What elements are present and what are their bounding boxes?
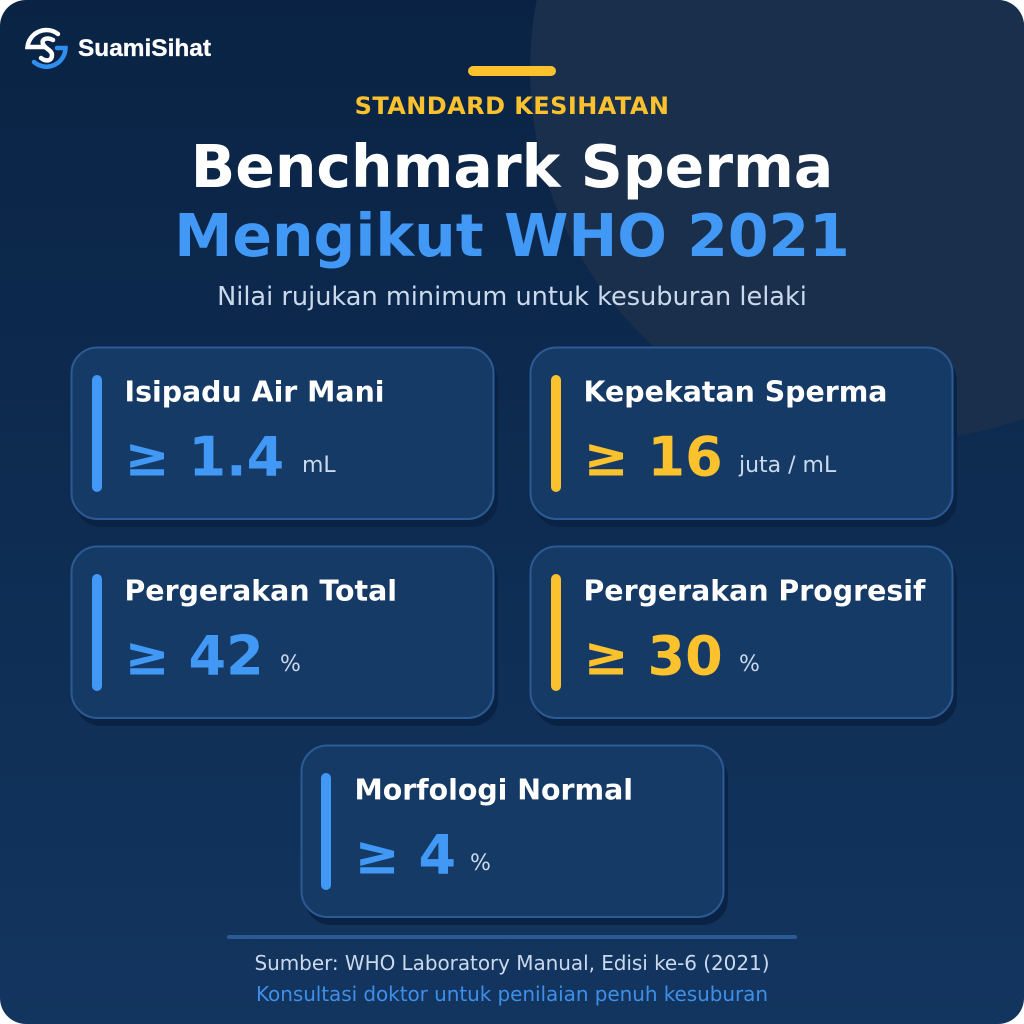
panel: Morfologi Normal: % [470, 851, 491, 876]
panel: Isipadu Air Mani: Isipadu Air Mani [124, 376, 385, 408]
consultation note: Konsultasi doktor untuk penilaian penuh kesuburan [256, 982, 768, 1006]
panel: Pergerakan Progresif: % [739, 652, 760, 677]
panel: Kepekatan Sperma: ≥ 16 [584, 426, 723, 488]
panel: Kepekatan Sperma: Kepekatan Sperma [584, 376, 887, 408]
panel: Pergerakan Progresif: ≥ 30 [584, 624, 723, 688]
panel: Morfologi Normal: ≥ 4 [354, 824, 456, 886]
panel: Kepekatan Sperma [530, 348, 957, 527]
title: Benchmark Sperma [191, 133, 833, 201]
source text: Sumber: WHO Laboratory Manual, Edisi ke-6 (2021) [254, 951, 770, 975]
panel: Isipadu Air Mani: ≥ 1.4 [124, 426, 284, 488]
panel: Kepekatan Sperma: juta / mL [738, 453, 837, 478]
panel: Pergerakan Total: % [280, 652, 301, 677]
logo wordmark: SuamiSihat [78, 35, 211, 62]
footer divider [227, 935, 797, 939]
panel: Pergerakan Total [72, 546, 498, 726]
accent bar [468, 66, 556, 76]
panel: Isipadu Air Mani [72, 348, 498, 527]
panel: Pergerakan Total: Pergerakan Total [124, 574, 397, 608]
eyebrow heading: STANDARD KESIHATAN [355, 92, 669, 120]
panel: Morfologi Normal [302, 746, 728, 925]
panel: Morfologi Normal: Morfologi Normal [354, 774, 633, 806]
logo [28, 30, 211, 67]
panel: Pergerakan Total: ≥ 42 [124, 624, 264, 688]
panel: Isipadu Air Mani: mL [302, 453, 336, 478]
panel: Pergerakan Progresif: Pergerakan Progresif [584, 574, 926, 608]
panel: Pergerakan Progresif [530, 546, 957, 726]
subtitle: Nilai rujukan minimum untuk kesuburan lelaki [217, 282, 807, 312]
title: Mengikut WHO 2021 [174, 202, 850, 270]
title [174, 133, 850, 270]
icon: logo mark [28, 30, 66, 67]
